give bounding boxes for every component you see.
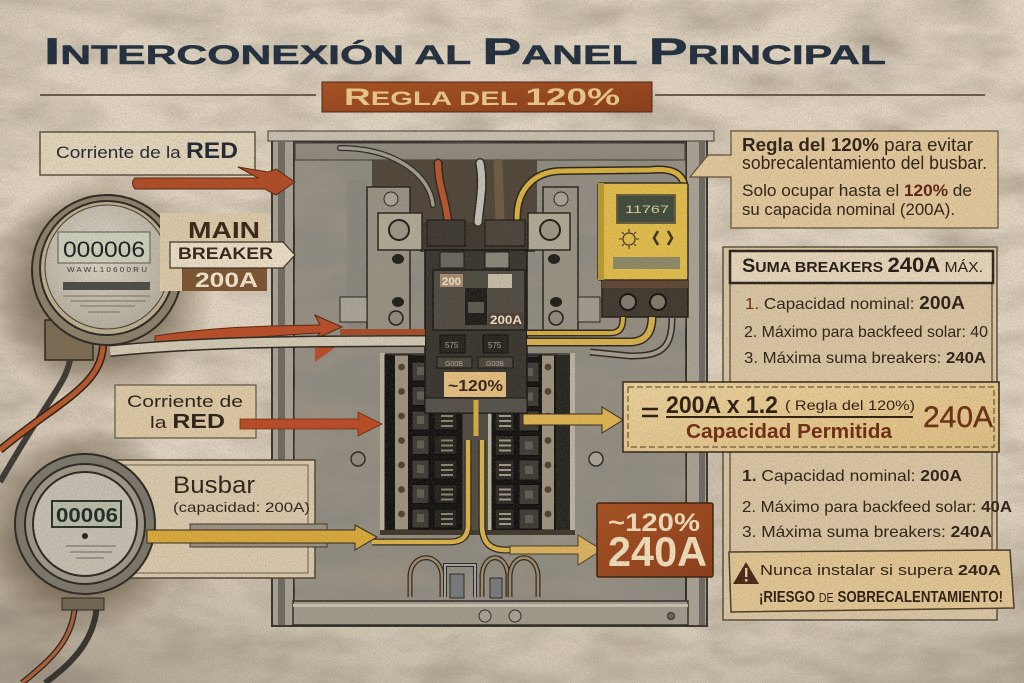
title: INTERCONEXIÓN AL P ANEL P RINCIPAL <box>44 31 886 72</box>
label: Corriente de la RED (middle): la RED <box>150 411 225 433</box>
utility meter 2: 00006 <box>56 505 118 527</box>
label: Corriente de la RED (middle): Corriente de <box>127 392 243 411</box>
callout: formula: 200A x 1.2 <box>666 392 778 419</box>
wires from inverter to breaker <box>527 317 672 356</box>
label: Corriente de la RED (top) <box>40 132 255 175</box>
utility meter 1: W A W L 1 0 6 0 0 R U <box>67 267 147 274</box>
main breaker 200A: 200A <box>490 313 522 327</box>
main breaker 200A <box>425 220 527 413</box>
heading: suma breakers 240A max <box>730 251 993 283</box>
callout: formula: ( Regla del 120%) <box>785 397 915 413</box>
breaker rows <box>380 353 575 535</box>
arrow: red current middle <box>240 412 382 436</box>
arrow: yellow to formula <box>523 407 623 433</box>
label: Busbar capacity: Busbar <box>173 472 255 499</box>
banner: Regla del 120%: R EGLA DEL 120% <box>344 84 620 111</box>
~120% tag <box>444 372 506 397</box>
warning box: Nunca instalar si supera 240A <box>760 562 1001 579</box>
solar inverter: 11767 <box>625 204 669 216</box>
label: Main Breaker 200A: 200A <box>195 269 258 292</box>
arrow: yellow busbar feed <box>147 525 377 550</box>
mounting brackets and clamps <box>340 180 600 332</box>
main breaker 200A: 575 <box>445 341 459 350</box>
solar inverter <box>598 183 688 317</box>
label: Main Breaker 200A <box>160 213 295 292</box>
warning box <box>729 550 1014 612</box>
main breaker 200A: G00B <box>486 361 504 368</box>
label: Main Breaker 200A: MAIN <box>188 217 260 243</box>
label: Corriente de la RED (middle) <box>115 385 256 438</box>
list: second capacity list <box>742 468 1012 541</box>
list: second capacity list: 2. Máximo para backfeed solar: 40A <box>742 499 1012 516</box>
arrow: yellow to 240A <box>510 535 602 565</box>
callout: formula: Capacidad Permitida <box>686 421 893 443</box>
callout: regla del 120%: sobrecalentamiento del busbar. <box>742 153 987 173</box>
callout: 240A result: 240A <box>608 528 707 575</box>
list: first capacity list: 2. Máximo para backfeed solar: 40 <box>744 324 988 341</box>
label: Busbar capacity: (capacidad: 200A) <box>173 499 310 515</box>
label: Corriente de la RED (top): Corriente de la RED <box>56 138 238 163</box>
callout: formula: 240A <box>923 401 993 434</box>
callout: regla del 120%: su capacida nominal (200A). <box>742 200 955 219</box>
label: Main Breaker 200A: BREAKER <box>178 244 273 263</box>
electrical panel enclosure <box>268 131 714 626</box>
icon: warning triangle <box>733 562 759 584</box>
list: first capacity list: 3. Máxima suma breakers: 240A <box>744 350 986 367</box>
wires entering from the top <box>340 148 684 222</box>
~120% tag: ~120% <box>448 378 503 395</box>
busbar yellow conductors <box>372 400 582 550</box>
callout: 240A result: ~120% <box>608 509 700 537</box>
list: second capacity list: 3. Máxima suma breakers: 240A <box>742 524 992 541</box>
callout: formula <box>623 382 999 452</box>
callout: 240A result <box>597 503 713 577</box>
main breaker 200A: 575 <box>488 341 502 350</box>
list: first capacity list: 1. Capacidad nominal: 200A <box>745 293 965 313</box>
list: second capacity list: 1. Capacidad nominal: 200A <box>742 468 962 485</box>
arrow: red feed to breaker <box>155 315 425 362</box>
main breaker 200A: G00B <box>445 361 463 368</box>
panel: suma breakers <box>723 247 1012 620</box>
utility meter 1: 000006 <box>63 237 145 262</box>
main breaker 200A: 200 <box>442 276 461 288</box>
heading: suma breakers 240A max: SUMA BREAKERS 240A MÁX. <box>742 254 983 277</box>
list: first capacity list <box>744 293 988 367</box>
callout: regla del 120%: Solo ocupar hasta el 120% de <box>742 181 972 200</box>
callout: regla del 120% <box>690 131 998 228</box>
utility meter 2 <box>15 454 155 683</box>
banner: Regla del 120% <box>40 82 985 112</box>
lower lug wires <box>410 558 538 598</box>
utility meter 1 <box>0 195 182 482</box>
arrow: red current top <box>132 167 295 195</box>
cable: service cable to breaker <box>110 341 425 351</box>
label: Busbar capacity <box>113 460 327 578</box>
callout: regla del 120%: Regla del 120% para evitar <box>742 135 973 155</box>
